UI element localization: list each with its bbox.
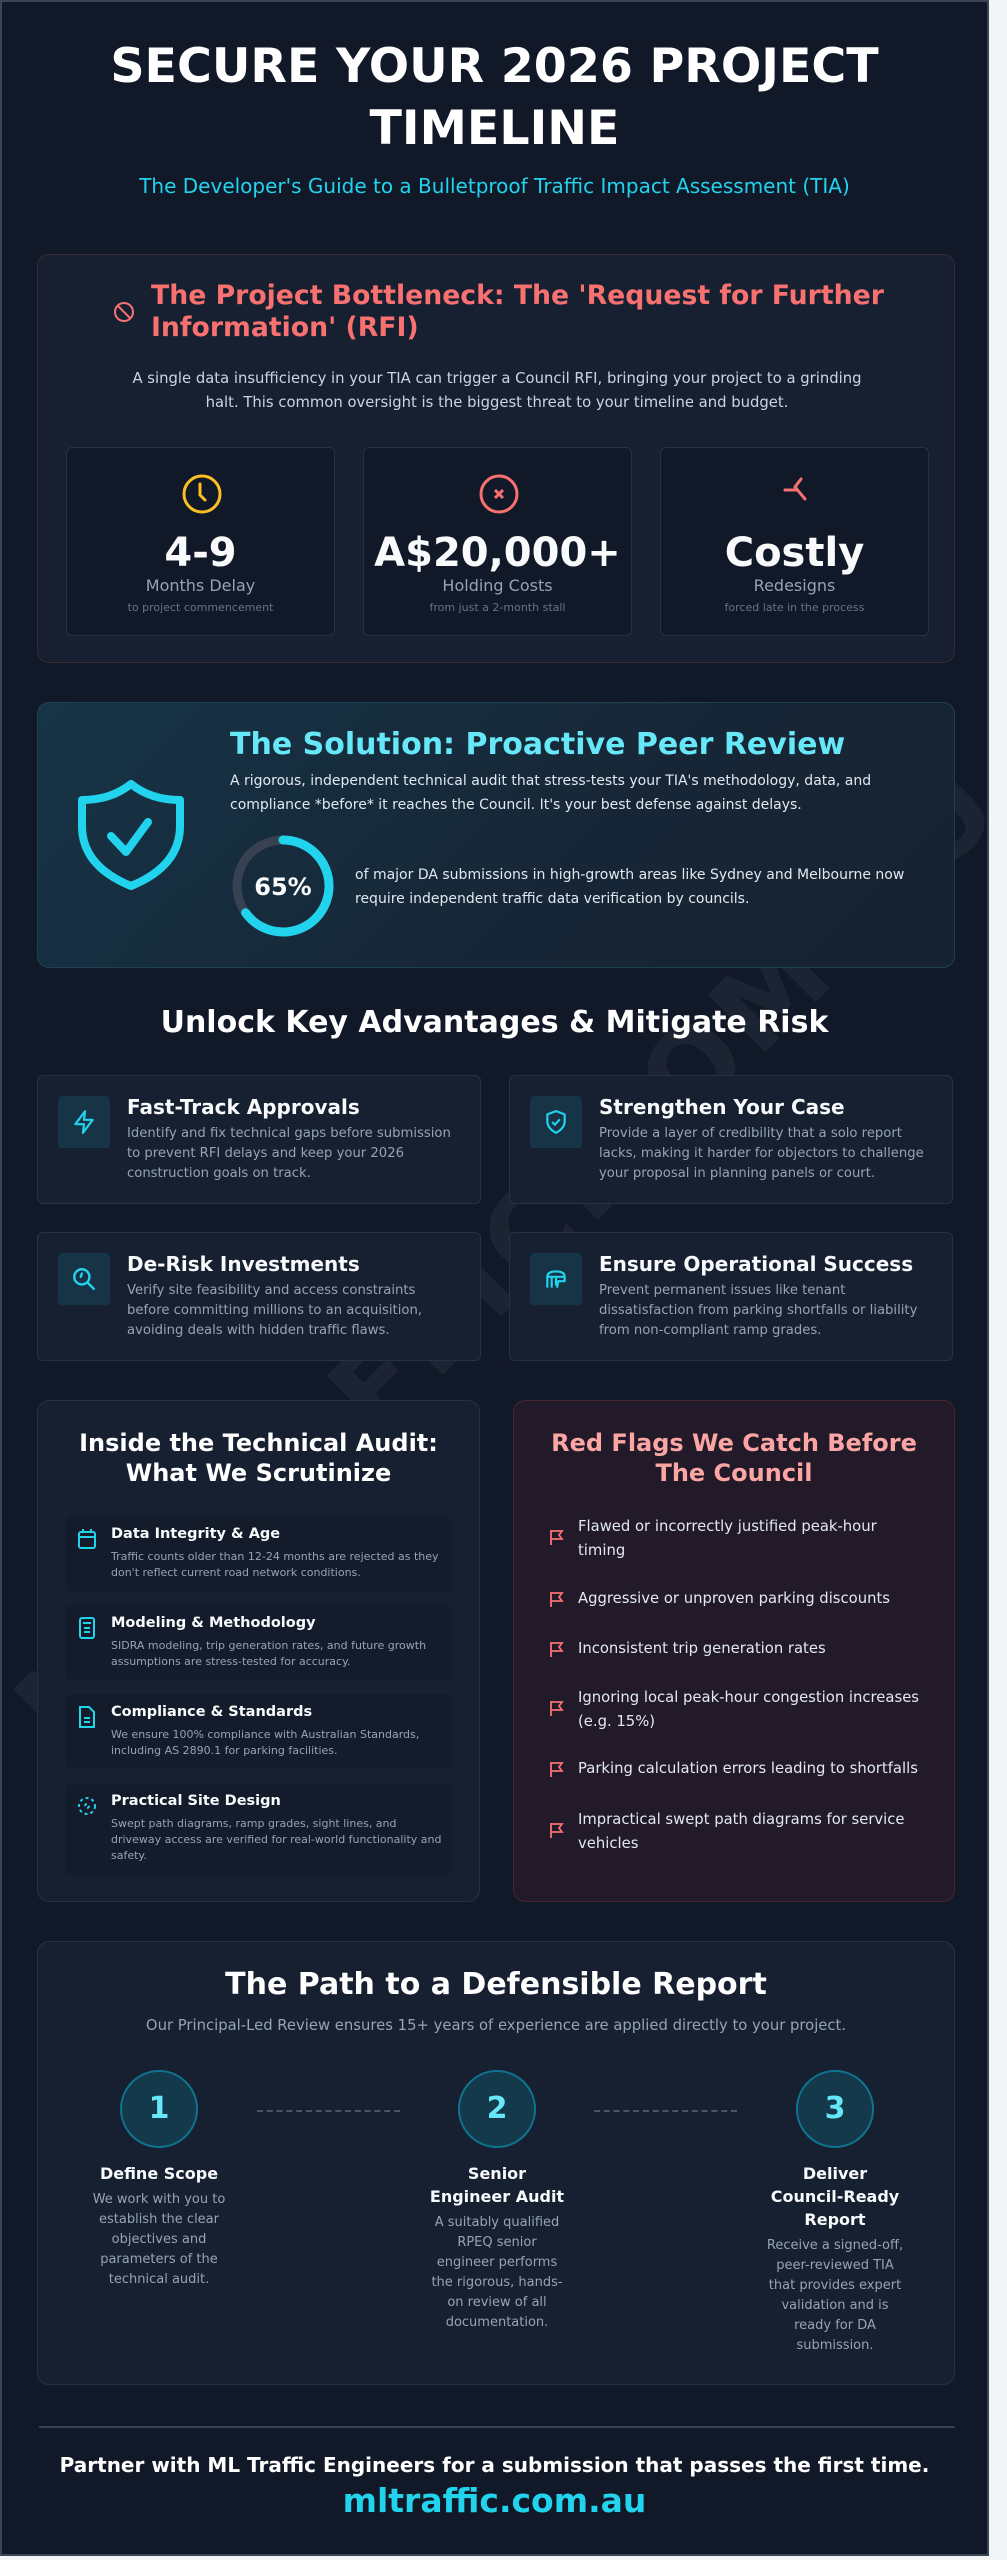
title: TIMELINE xyxy=(370,101,619,156)
heading: The Council xyxy=(655,1459,813,1487)
heading: Red Flags We Catch Before xyxy=(551,1429,917,1457)
title: SECURE YOUR 2026 PROJECT xyxy=(110,39,879,94)
card: de-risk xyxy=(37,1232,481,1361)
item: data xyxy=(65,1516,452,1592)
panel: red flags xyxy=(513,1400,955,1902)
step 1: 1 xyxy=(149,2091,169,2126)
step 3: 3 xyxy=(825,2091,845,2126)
step 1: Define Scope xyxy=(100,2164,218,2183)
step 3: Receive a signed-off, peer-reviewed TIA that provides expert validation and is ready for DA submission. xyxy=(767,2238,903,2353)
card: strengthen xyxy=(509,1075,953,1204)
card: de-risk: De-Risk Investments xyxy=(127,1252,360,1276)
panel: technical audit xyxy=(37,1400,480,1902)
item: site design xyxy=(65,1783,452,1875)
panel: solution xyxy=(37,702,955,968)
item: modeling: SIDRA modeling, trip generation rates, and future growth assumptions are stress-tested for accuracy. xyxy=(111,1639,426,1668)
subheading: Our Principal-Led Review ensures 15+ years of experience are applied directly to your project. xyxy=(146,2017,846,2034)
arrow: dashed connector 1 xyxy=(257,2110,400,2112)
icon: shield xyxy=(78,780,184,890)
card: operational: Ensure Operational Success xyxy=(599,1252,913,1276)
paragraph: A single data insufficiency in your TIA can trigger a Council RFI, bringing your project to a grinding halt. This common oversight is the biggest threat to your timeline and budget. xyxy=(132,370,862,411)
title xyxy=(110,39,879,156)
item: modeling: Modeling & Methodology xyxy=(111,1615,316,1631)
stat: delay: 4-9 xyxy=(164,530,237,576)
card: fast-track: Identify and fix technical gaps before submission to prevent RFI delays and keep your 2026 construction goals on track. xyxy=(127,1126,451,1181)
heading: The Solution: Proactive Peer Review xyxy=(230,727,845,762)
step 3: Council-Ready xyxy=(771,2187,899,2206)
flag list: Impractical swept path diagrams for service vehicles xyxy=(578,1811,905,1852)
flag list: Aggressive or unproven parking discounts xyxy=(578,1590,890,1607)
stat: redesigns: Redesigns xyxy=(754,576,835,595)
stat: redesigns: forced late in the process xyxy=(725,601,864,614)
item: site design: Practical Site Design xyxy=(111,1793,281,1809)
card: fast-track: Fast-Track Approvals xyxy=(127,1095,360,1119)
step 2: Engineer Audit xyxy=(430,2187,564,2206)
panel: bottleneck xyxy=(37,254,955,663)
flag list: Parking calculation errors leading to shortfalls xyxy=(578,1760,918,1777)
card: strengthen: Provide a layer of credibility that a solo report lacks, making it harder for objectors to challenge your proposal in planning panels or court. xyxy=(599,1126,924,1181)
stat: delay xyxy=(66,447,335,636)
item: site design: Swept path diagrams, ramp grades, sight lines, and driveway access are verified for real-world functionality and safety. xyxy=(111,1817,441,1862)
step 2: A suitably qualified RPEQ senior engineer performs the rigorous, hands-on review of all documentation. xyxy=(431,2215,563,2330)
step 2 xyxy=(430,2070,564,2330)
item: data: Data Integrity & Age xyxy=(111,1526,280,1542)
step 1 xyxy=(93,2070,225,2287)
arrow: dashed connector 2 xyxy=(594,2110,737,2112)
heading: The Path to a Defensible Report xyxy=(225,1967,767,2002)
item: data: Traffic counts older than 12-24 months are rejected as they don't reflect current road network conditions. xyxy=(111,1550,439,1579)
step 2: Senior xyxy=(468,2164,526,2183)
step 2: 2 xyxy=(487,2091,507,2126)
card: operational xyxy=(509,1232,953,1361)
stat: costs: A$20,000+ xyxy=(374,530,621,576)
item: compliance xyxy=(65,1694,452,1769)
flag list: Ignoring local peak-hour congestion increases (e.g. 15%) xyxy=(578,1689,919,1730)
stat: redesigns xyxy=(660,447,929,636)
stat text: of major DA submissions in high-growth areas like Sydney and Melbourne now require independent traffic data verification by councils. xyxy=(355,867,904,907)
item: modeling xyxy=(65,1605,452,1681)
footer text: Partner with ML Traffic Engineers for a submission that passes the first time. xyxy=(60,2453,929,2477)
stat: delay: to project commencement xyxy=(128,601,273,614)
footer url: mltraffic.com.au xyxy=(343,2481,646,2520)
stat: costs: Holding Costs xyxy=(442,576,553,595)
step 1: We work with you to establish the clear objectives and parameters of the technical audit. xyxy=(93,2192,225,2287)
heading: Inside the Technical Audit: xyxy=(79,1429,438,1457)
heading: The Project Bottleneck: The 'Request for Further Information' (RFI) xyxy=(151,280,884,343)
item: compliance: We ensure 100% compliance with Australian Standards, including AS 2890.1 for parking facilities. xyxy=(111,1728,419,1757)
stat: costs xyxy=(363,447,632,636)
paragraph: A rigorous, independent technical audit that stress-tests your TIA's methodology, data, and compliance *before* it reaches the Council. It's your best defense against delays. xyxy=(230,773,871,813)
heading xyxy=(551,1429,917,1487)
step 3 xyxy=(767,2070,903,2353)
item: compliance: Compliance & Standards xyxy=(111,1704,312,1720)
heading: advantages: Unlock Key Advantages & Mitigate Risk xyxy=(161,1005,828,1040)
card: strengthen: Strengthen Your Case xyxy=(599,1095,845,1119)
stat: delay: Months Delay xyxy=(146,576,255,595)
card: fast-track xyxy=(37,1075,481,1204)
flag list: Flawed or incorrectly justified peak-hour timing xyxy=(578,1518,877,1559)
panel: path xyxy=(37,1941,955,2385)
flag list xyxy=(550,1518,919,1852)
heading xyxy=(79,1429,438,1487)
step 3: Report xyxy=(804,2210,866,2229)
flag list: Inconsistent trip generation rates xyxy=(578,1640,826,1657)
heading: What We Scrutinize xyxy=(126,1459,391,1487)
stat: redesigns: Costly xyxy=(725,530,864,576)
icon: ban xyxy=(114,302,134,322)
card: operational: Prevent permanent issues like tenant dissatisfaction from parking shortfalls or liability from non-compliant ramp grades. xyxy=(599,1283,917,1338)
donut chart: 65% xyxy=(232,836,334,936)
donut chart: 65%: 65% xyxy=(254,873,312,901)
stat: costs: from just a 2-month stall xyxy=(430,601,565,614)
subtitle: The Developer's Guide to a Bulletproof Traffic Impact Assessment (TIA) xyxy=(139,174,850,198)
step 3: Deliver xyxy=(803,2164,867,2183)
card: de-risk: Verify site feasibility and access constraints before committing millions to an acquisition, avoiding deals with hidden traffic flaws. xyxy=(127,1283,422,1338)
